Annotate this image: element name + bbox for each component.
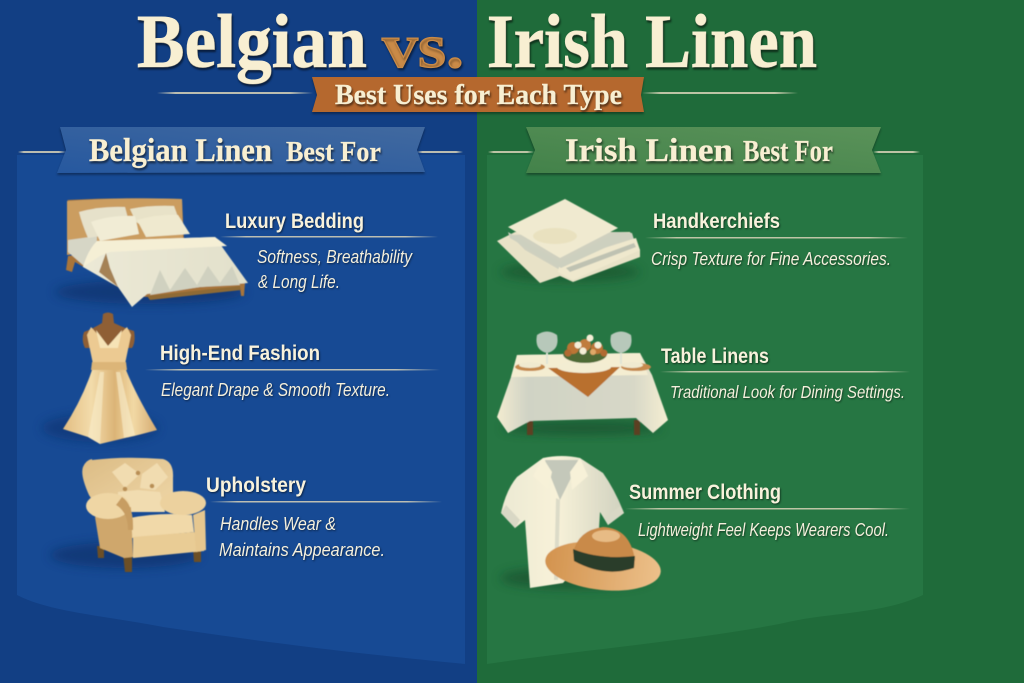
item: High-End Fashion bbox=[42, 312, 440, 444]
background: blue half bbox=[0, 0, 477, 683]
text: Upholstery description: Maintains Appearance. bbox=[219, 540, 385, 560]
text: Luxury Bedding description bbox=[257, 247, 413, 292]
text: High-End Fashion description: Elegant Drape & Smooth Texture. bbox=[161, 380, 390, 400]
heading: Table Linens: Table Linens bbox=[661, 345, 769, 368]
icon: folded handkerchiefs bbox=[497, 199, 640, 283]
heading ribbon: Belgian Linen Best For: Best For bbox=[286, 136, 381, 168]
heading ribbon: Irish Linen Best For bbox=[488, 127, 920, 173]
background: green half bbox=[477, 0, 1024, 683]
title: Irish Linen bbox=[487, 0, 817, 84]
item: Upholstery bbox=[50, 458, 442, 572]
item: Luxury Bedding bbox=[55, 198, 438, 307]
text: Table Linens description: Traditional Look for Dining Settings. bbox=[670, 382, 905, 402]
panel: Irish linen bbox=[487, 155, 923, 664]
text: Luxury Bedding description: & Long Life. bbox=[258, 272, 340, 292]
text: Upholstery description: Handles Wear & bbox=[220, 514, 336, 534]
panel: Belgian linen bbox=[17, 155, 465, 664]
heading: Summer Clothing: Summer Clothing bbox=[629, 481, 781, 504]
item: Handkerchiefs bbox=[497, 199, 908, 283]
heading: Luxury Bedding: Luxury Bedding bbox=[225, 210, 364, 233]
icon: dress on mannequin bbox=[42, 312, 158, 444]
icon: bed bbox=[55, 198, 248, 307]
icon: shirt and straw hat bbox=[500, 456, 663, 596]
subtitle ribbon bbox=[157, 77, 798, 112]
heading: Upholstery: Upholstery bbox=[206, 474, 306, 497]
heading ribbon: Belgian Linen Best For bbox=[18, 127, 463, 173]
item: Summer Clothing bbox=[500, 456, 910, 596]
subtitle ribbon: Best Uses for Each Type bbox=[335, 80, 622, 111]
text: Summer Clothing description: Lightweight Feel Keeps Wearers Cool. bbox=[638, 520, 889, 540]
text: Upholstery description bbox=[219, 514, 385, 560]
heading: Handkerchiefs: Handkerchiefs bbox=[653, 210, 780, 233]
icon: dressed table with flowers and glasses bbox=[497, 332, 668, 435]
title: vs. bbox=[382, 13, 464, 81]
title: Belgian bbox=[137, 0, 367, 84]
heading ribbon: Belgian Linen Best For: Belgian Linen bbox=[89, 133, 272, 169]
title bbox=[137, 0, 817, 84]
item: Table Linens bbox=[497, 332, 910, 435]
text: Luxury Bedding description: Softness, Breathability bbox=[257, 247, 413, 267]
text: Handkerchiefs description: Crisp Texture for Fine Accessories. bbox=[651, 249, 891, 269]
icon: armchair bbox=[50, 458, 206, 572]
heading: High-End Fashion: High-End Fashion bbox=[160, 342, 320, 365]
heading ribbon: Irish Linen Best For: Irish Linen bbox=[565, 133, 733, 169]
heading ribbon: Irish Linen Best For: Best For bbox=[743, 133, 833, 168]
